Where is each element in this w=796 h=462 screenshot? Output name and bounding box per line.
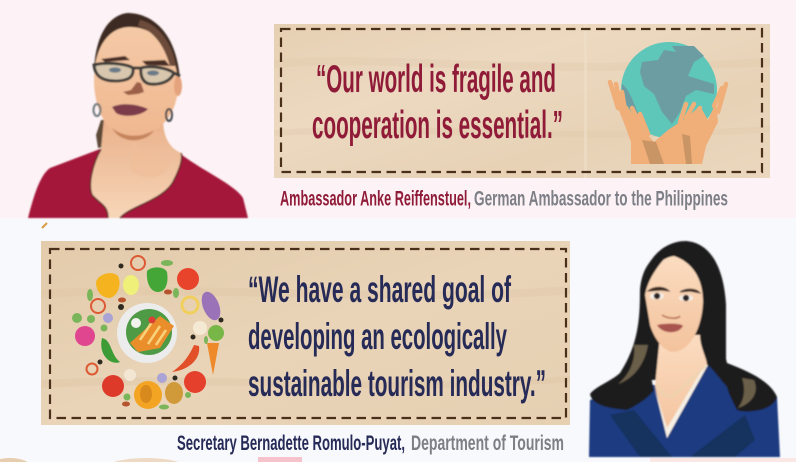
necklace [656, 366, 706, 397]
hair [94, 13, 180, 88]
hands [618, 102, 718, 164]
lapel shadows [610, 410, 755, 457]
globe [621, 42, 717, 138]
face [94, 27, 178, 137]
pink cabbage [75, 326, 95, 346]
earring left [94, 104, 100, 116]
yellow pepper ring [182, 297, 198, 313]
carrot [207, 343, 219, 375]
card background [274, 24, 770, 178]
neckline dark edge [90, 149, 182, 218]
eyes [650, 292, 664, 300]
quote text: sustainable tourism industry.” [248, 363, 546, 404]
quote text [312, 58, 563, 147]
eyebrows [101, 56, 170, 66]
tan shape left [0, 458, 30, 462]
nose [662, 315, 680, 318]
background: lower band [0, 218, 796, 462]
eggplant [198, 289, 224, 323]
panel: tourism secretary quote card [41, 241, 570, 425]
icon: hands holding globe [610, 42, 726, 164]
eyes [109, 67, 121, 73]
card background [41, 241, 570, 425]
quote text: “Our world is fragile and [316, 58, 556, 101]
tan shape centre [106, 458, 186, 462]
panel: ambassador quote card [274, 24, 770, 178]
quote text: developing an ecologically [248, 316, 507, 357]
eyebrows [648, 287, 700, 293]
caption: secretary attribution: Department of Tourism [411, 431, 564, 455]
face [645, 256, 703, 352]
jacket [28, 149, 248, 218]
olives [98, 264, 224, 380]
ponytail [96, 120, 108, 148]
quote text: cooperation is essential.” [312, 104, 563, 147]
ear right [174, 76, 182, 96]
right hair [673, 245, 777, 412]
red chili [172, 345, 199, 372]
pepper rings [86, 256, 145, 374]
portrait: Secretary Bernadette Romulo-Puyat [589, 241, 780, 457]
quote text: “We have a shared goal of [248, 269, 511, 310]
tomato lower left [102, 375, 124, 397]
footer: cropped shapes along the bottom edge [0, 457, 796, 462]
green chili [101, 338, 120, 363]
hair highlight [138, 20, 176, 66]
portrait: Ambassador Anke Reiffenstuel [28, 13, 248, 218]
left hair [590, 250, 673, 410]
stitched border [281, 29, 762, 172]
neck and chest [90, 118, 182, 218]
pumpkin [134, 381, 162, 409]
small garnishes [72, 260, 208, 410]
purple onions [103, 313, 167, 383]
mushroom [124, 369, 136, 381]
potato [165, 382, 183, 404]
nose shadow [123, 82, 144, 95]
pale yellow pepper [123, 275, 139, 295]
lips [112, 104, 148, 116]
pale pink strip right [650, 458, 796, 462]
green pepper [147, 267, 168, 292]
jacket [589, 366, 780, 457]
background: upper band [0, 0, 796, 218]
caption: ambassador attribution: Ambassador Anke Reiffenstuel, [280, 186, 471, 210]
icon: ring of vegetables around a plate [72, 256, 224, 410]
tomato top right [177, 268, 199, 290]
quote text [248, 269, 546, 404]
chest shadow [130, 140, 172, 177]
fingers [610, 82, 726, 134]
back hair [640, 241, 726, 380]
blouse edge [654, 365, 708, 438]
stitched border [50, 249, 566, 418]
broccoli [208, 325, 224, 341]
small orange mark [42, 223, 47, 228]
hair highlights [618, 345, 756, 408]
lips [657, 324, 683, 332]
glasses [94, 63, 180, 84]
earring right [166, 109, 172, 121]
neck and chest [655, 335, 707, 438]
caption: secretary attribution: Secretary Bernadette Romulo-Puyat, [177, 431, 405, 455]
plate with food [117, 303, 177, 363]
cauliflower [193, 321, 207, 335]
fold line [584, 24, 587, 178]
tomato lower right [184, 371, 206, 393]
pink block [258, 457, 302, 462]
jaw shadow [112, 128, 154, 140]
beans [118, 290, 172, 406]
yellow pepper [96, 273, 120, 298]
